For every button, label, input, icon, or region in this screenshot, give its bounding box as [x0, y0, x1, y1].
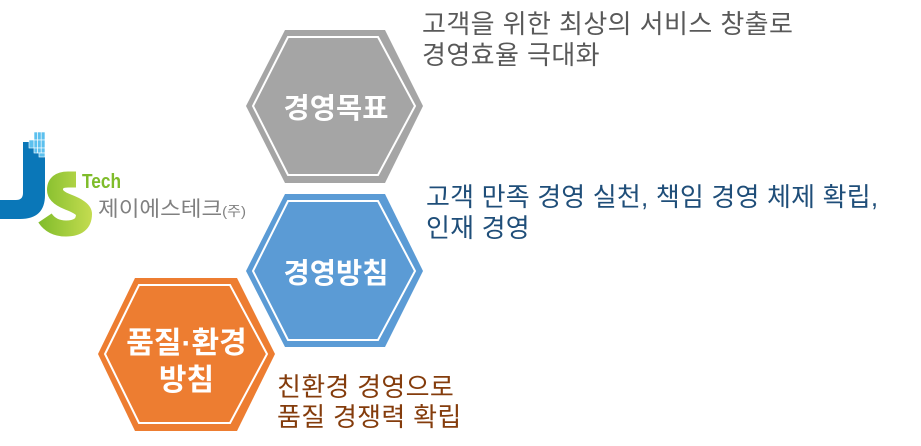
text: 경영방침 description: 고객 만족 경영 실천, 책임 경영 체제 확립,: [426, 182, 878, 212]
hexagon: 경영방침: [246, 194, 423, 347]
text: 경영목표 description: [422, 9, 793, 70]
text: 경영목표 description: 경영효율 극대화: [422, 40, 600, 70]
hexagon: 품질·환경 방침: 품질·환경: [126, 327, 247, 360]
hexagon: 품질·환경 방침: 방침: [159, 364, 214, 397]
hexagon: 경영목표: 경영목표: [284, 93, 388, 125]
logo text 제이에스테크(주): 제이에스테크 (주): [98, 198, 246, 221]
logo pixel grid: [29, 132, 45, 157]
hexagon: 품질·환경 방침: [98, 278, 275, 431]
logo text Tech: Tech: [82, 171, 121, 193]
text: 경영목표 description: 고객을 위한 최상의 서비스 창출로: [422, 9, 793, 39]
hexagon: 경영목표: [246, 30, 423, 183]
text: 품질·환경 방침 description: 품질 경쟁력 확립: [277, 402, 462, 432]
text: 품질·환경 방침 description: 친환경 경영으로: [277, 372, 454, 402]
text: 경영방침 description: 인재 경영: [426, 213, 530, 243]
text: 경영방침 description: [426, 182, 878, 243]
logo letter S: [45, 180, 84, 228]
logo: JS Tech 제이에스테크: [0, 132, 246, 228]
text: 품질·환경 방침 description: [277, 372, 462, 432]
logo letter J: [0, 142, 45, 219]
hexagon: 경영방침: 경영방침: [284, 258, 388, 290]
